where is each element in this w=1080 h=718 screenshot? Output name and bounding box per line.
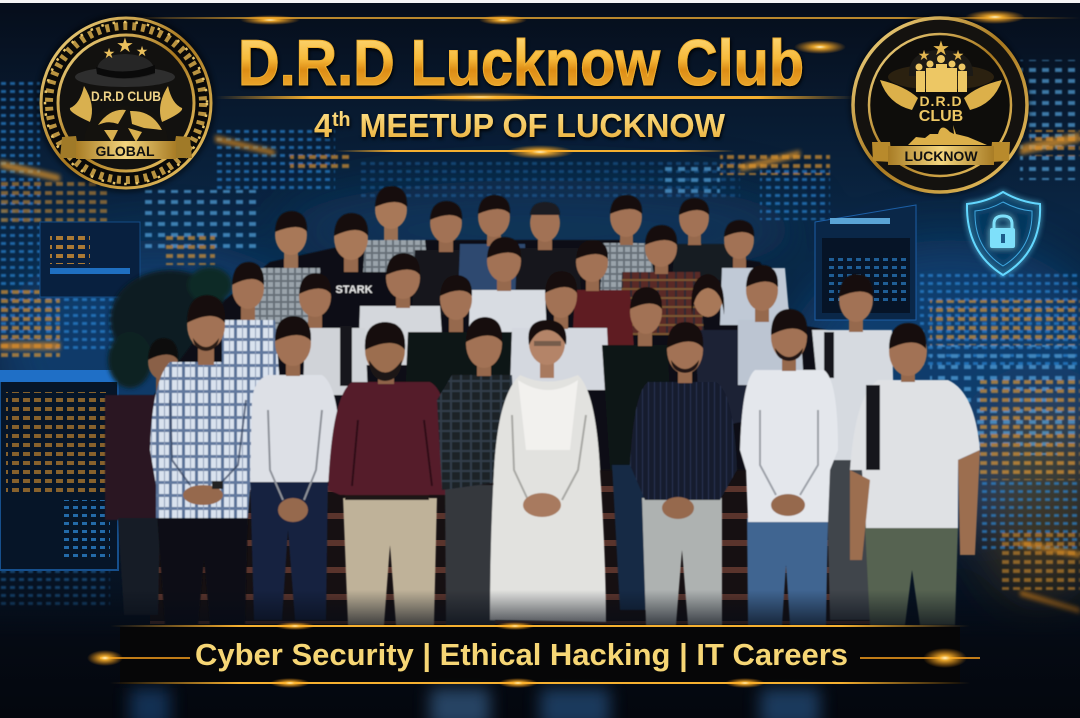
Lucknow skyline bbox=[908, 125, 987, 145]
ribbon: global: GLOBAL bbox=[95, 143, 155, 159]
person: navy floral woman bbox=[691, 274, 752, 430]
tagline: Cyber Security | Ethical Hacking | IT Careers bbox=[195, 637, 848, 672]
person: front row, navy shirt light grey trousers bbox=[630, 322, 737, 625]
stars bbox=[103, 35, 148, 61]
person: black shirt centre bbox=[405, 275, 515, 400]
person: back row 1 bbox=[252, 211, 326, 340]
person: white with backpack strap bbox=[299, 273, 368, 395]
subtitle: 4 bbox=[314, 107, 332, 144]
badge: D.R.D Club Lucknow bbox=[849, 14, 1031, 196]
group of people bbox=[105, 186, 980, 625]
stars: ★ bbox=[103, 45, 115, 61]
stars: ★ bbox=[952, 47, 964, 63]
wings bbox=[70, 86, 182, 122]
stars bbox=[918, 38, 964, 63]
person: white shirt left-centre bbox=[358, 253, 444, 365]
floor shadow and wet reflection bbox=[0, 590, 1080, 718]
club name: D.R.D CLUB bbox=[91, 88, 161, 104]
stars: ★ bbox=[918, 47, 930, 63]
person: front row, plaid shirt bbox=[150, 295, 265, 625]
person: front row, dark plaid grey trousers bbox=[437, 317, 516, 625]
person: light blue shirt bbox=[738, 265, 804, 385]
top decorative light rule bbox=[120, 10, 1080, 54]
club name: D.R.D bbox=[919, 93, 963, 109]
stars: ★ bbox=[116, 35, 134, 57]
bottom banner bbox=[87, 622, 980, 688]
ribbon: global bbox=[60, 136, 192, 159]
person: white shirt with backpack, right bbox=[812, 274, 895, 620]
panel: left upper screen bbox=[40, 222, 140, 297]
person: dark maroon, far left bbox=[105, 338, 178, 615]
person: STARK t-shirt bbox=[318, 213, 394, 335]
subtitle: th bbox=[332, 109, 350, 131]
title: D.R.D Lucknow Club bbox=[238, 26, 804, 99]
club name bbox=[919, 93, 963, 125]
panel: right data screen bbox=[815, 205, 916, 320]
person: black shirt, dark jeans, right of centre bbox=[602, 287, 672, 610]
stars: ★ bbox=[932, 38, 950, 60]
staircase bbox=[150, 446, 880, 624]
ribbon: lucknow: LUCKNOW bbox=[904, 148, 978, 164]
person: front row, white shirt blue jeans bbox=[740, 309, 838, 625]
person: back row 8 bbox=[720, 220, 790, 325]
person: back row 6 bbox=[600, 195, 656, 295]
person: back row 3 bbox=[412, 201, 485, 315]
globe bbox=[84, 106, 168, 143]
ribbon: lucknow bbox=[872, 142, 1010, 165]
crowd shadow backing bbox=[150, 240, 885, 470]
banner rules bbox=[87, 622, 980, 688]
hat icon bbox=[75, 54, 175, 87]
wings bbox=[880, 80, 1002, 110]
panel: left holographic screen bbox=[0, 370, 118, 570]
person: glasses, maroon plaid bbox=[620, 225, 704, 335]
plant bbox=[108, 267, 232, 388]
person: front row, white polo olive trousers bbox=[850, 323, 980, 625]
person: front row, maroon shirt beige trousers bbox=[328, 322, 451, 625]
person: back row 4 bbox=[458, 195, 528, 300]
person: back row 2 bbox=[362, 186, 430, 290]
person: white shirt centre bbox=[468, 237, 548, 365]
title rule bbox=[215, 92, 855, 102]
person: front row, white shirt navy trousers bbox=[250, 316, 340, 620]
person: front row, woman in white salwar bbox=[490, 320, 606, 622]
person: white shirt centre right bbox=[510, 271, 610, 390]
person: blue plaid bbox=[222, 262, 280, 385]
stars: ★ bbox=[136, 43, 148, 59]
club name: CLUB bbox=[919, 108, 963, 125]
hat with five figures bbox=[888, 50, 994, 92]
person: back row 7 bbox=[672, 198, 735, 280]
subtitle: MEETUP OF LUCKNOW bbox=[350, 107, 726, 144]
person: back row 5, cap bbox=[515, 202, 582, 305]
person: red shirt bbox=[572, 240, 634, 350]
subtitle rule bbox=[335, 145, 735, 159]
person: STARK t-shirt: STARK bbox=[335, 284, 373, 296]
badge: D.R.D Club Global bbox=[36, 13, 216, 193]
icon: security shield with padlock bbox=[967, 192, 1040, 275]
